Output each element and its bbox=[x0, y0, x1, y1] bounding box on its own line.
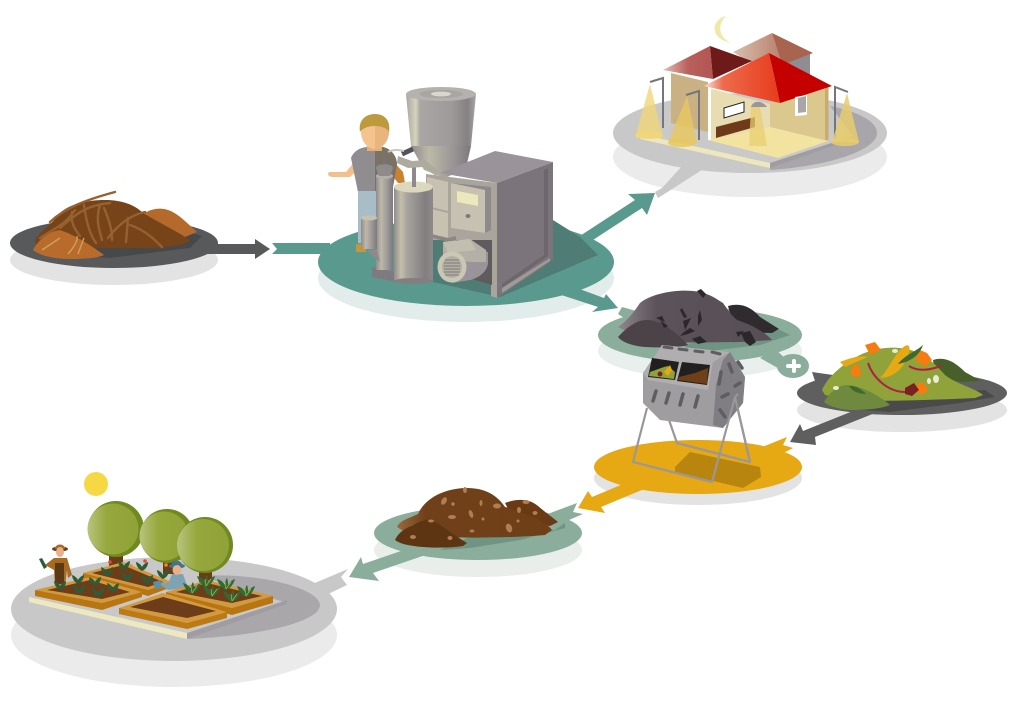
icon: sun bbox=[84, 472, 108, 496]
arrow tail bbox=[755, 437, 793, 460]
farmer right bbox=[153, 561, 188, 590]
panel: finished compost plate bbox=[349, 487, 583, 581]
arrow tail bbox=[310, 569, 348, 597]
moon bbox=[715, 16, 731, 43]
pipe bbox=[388, 149, 440, 176]
cabinet bbox=[426, 151, 553, 298]
pile shadow bbox=[680, 330, 790, 352]
plate shadow bbox=[318, 234, 614, 322]
arrow: to garden bbox=[349, 540, 443, 581]
plate bbox=[11, 557, 337, 661]
control panels bbox=[427, 177, 491, 243]
arrow: intake bbox=[272, 243, 330, 254]
back house bbox=[733, 33, 813, 100]
compost pile bbox=[395, 487, 558, 548]
pile shadow bbox=[440, 523, 565, 550]
panel: house energy plate bbox=[613, 16, 887, 198]
person bbox=[328, 114, 405, 252]
food scrap pile bbox=[822, 342, 983, 410]
slab bbox=[640, 112, 853, 168]
plate shadow bbox=[594, 451, 802, 505]
main house bbox=[704, 53, 832, 158]
plate bbox=[594, 440, 802, 494]
tumbler shadow bbox=[675, 452, 761, 488]
arrow: to composter bbox=[790, 407, 875, 445]
plus connector bbox=[760, 349, 800, 372]
raised bed left bbox=[35, 575, 142, 610]
panel: biochar plate bbox=[598, 289, 809, 378]
arrow: to energy bbox=[563, 193, 655, 255]
frame back bbox=[669, 397, 750, 462]
plate bbox=[797, 371, 1007, 415]
plate shadow bbox=[11, 583, 337, 687]
farmer left bbox=[39, 544, 72, 585]
hopper bbox=[406, 87, 476, 178]
cabinet bbox=[716, 117, 755, 138]
plate bbox=[374, 506, 582, 560]
biochar pile bbox=[618, 289, 779, 347]
plate shadow bbox=[374, 523, 582, 577]
ground shadow bbox=[187, 575, 320, 639]
base and cylinders bbox=[361, 158, 433, 284]
plate bbox=[318, 218, 614, 306]
ground shadow bbox=[770, 106, 877, 170]
frame front bbox=[633, 394, 738, 482]
plate bbox=[598, 308, 802, 362]
arrow: to pyrolysis bbox=[205, 239, 270, 259]
machine shadow bbox=[433, 220, 598, 297]
trees bbox=[88, 501, 233, 582]
connector arrow tail bbox=[655, 165, 705, 198]
slab bbox=[29, 597, 287, 639]
street lights bbox=[635, 78, 859, 147]
plate shadow bbox=[797, 388, 1007, 432]
pile shadow bbox=[36, 232, 202, 258]
left house bbox=[663, 46, 752, 132]
window: compost bbox=[677, 362, 710, 385]
plate bbox=[613, 93, 887, 173]
plate shadow bbox=[10, 235, 218, 285]
raised bed back bbox=[83, 559, 172, 596]
icon: plus badge bbox=[777, 354, 809, 378]
machine bbox=[361, 87, 553, 298]
lamp bbox=[749, 107, 767, 146]
panel: garden plate bbox=[11, 472, 348, 687]
plate tab top bbox=[618, 307, 640, 322]
plate shadow bbox=[598, 324, 802, 378]
raised bed right bbox=[166, 575, 273, 615]
panel: pyrolysis machine plate bbox=[272, 87, 655, 322]
panel: raw biomass plate bbox=[10, 192, 270, 285]
panel: food scraps plate bbox=[790, 342, 1007, 445]
window bbox=[795, 95, 807, 116]
panel: composter plate bbox=[578, 345, 802, 513]
window: food bbox=[648, 358, 679, 380]
compost tumbler bbox=[633, 345, 750, 482]
plate tail bbox=[812, 372, 840, 388]
tv bbox=[724, 102, 744, 118]
raised bed front bbox=[119, 593, 227, 629]
mulch pile bbox=[33, 192, 197, 259]
motor bbox=[438, 239, 488, 283]
arrow: to biochar bbox=[540, 280, 618, 312]
roof bbox=[704, 53, 780, 103]
arrow tail bbox=[545, 503, 583, 526]
arrow: to finished compost bbox=[578, 472, 661, 513]
plate bbox=[10, 218, 218, 268]
drum bbox=[643, 345, 745, 428]
pile shadow bbox=[830, 390, 995, 412]
plate shadow bbox=[613, 117, 887, 197]
